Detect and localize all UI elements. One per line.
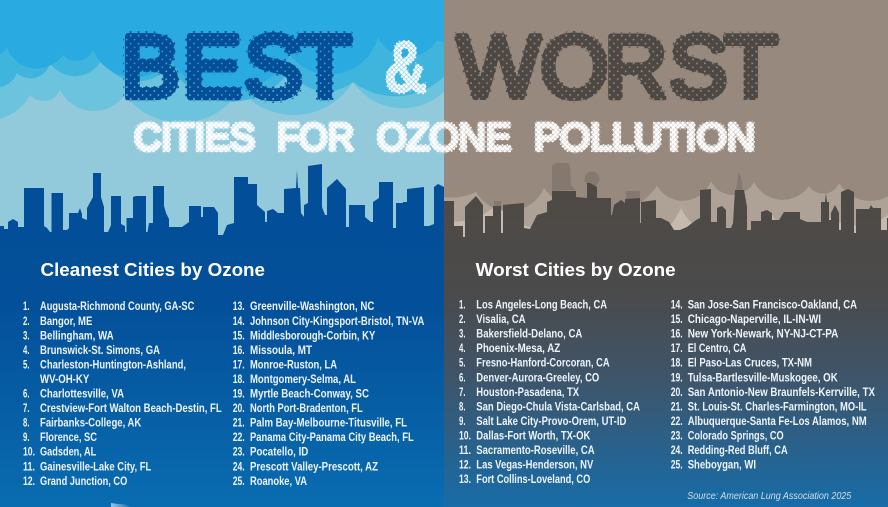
list: cleanest cities 1-12: 3.	[23, 329, 30, 342]
subtitle: OZONE	[377, 117, 511, 159]
list: worst cities 1-13: Houston-Pasadena, TX	[476, 386, 579, 399]
list: worst cities 1-13: 3.	[459, 328, 466, 341]
list: worst cities 14-25: 20.	[671, 386, 683, 399]
list: cleanest cities 13-25: Pocatello, ID	[250, 446, 308, 459]
list: cleanest cities 13-25: Monroe-Ruston, LA	[250, 358, 337, 371]
subtitle: POLLUTION	[534, 117, 755, 159]
list: worst cities 14-25: 16.	[671, 328, 683, 341]
list: cleanest cities 13-25: 22.	[233, 431, 245, 444]
subtitle: FOR	[277, 117, 354, 159]
list: worst cities 1-13: Phoenix-Mesa, AZ	[476, 342, 560, 355]
list: cleanest cities 13-25: Greenville-Washington, NC	[250, 300, 375, 313]
list: cleanest cities 13-25: 18.	[233, 373, 245, 386]
list: worst cities 1-13: Fresno-Hanford-Corcoran, CA	[476, 357, 610, 370]
faint buildings behind the smog	[494, 163, 743, 207]
list: worst cities 1-13: Visalia, CA	[476, 313, 526, 326]
list: worst cities 14-25: Chicago-Naperville, IL-IN-WI	[688, 313, 821, 326]
list: worst cities 1-13: 8.	[459, 400, 466, 413]
title: WORST: WORST	[457, 17, 778, 116]
panel: polluted sky	[444, 0, 888, 237]
list: cleanest cities 1-12: 1.	[23, 300, 30, 313]
list: worst cities 1-13	[459, 298, 641, 486]
list: worst cities 14-25: El Centro, CA	[688, 342, 747, 355]
list: cleanest cities 1-12: 5.	[23, 358, 30, 371]
list: worst cities 1-13: Fort Collins-Loveland, CO	[476, 473, 590, 486]
list: worst cities 1-13: Las Vegas-Henderson, NV	[476, 459, 594, 472]
list: cleanest cities 1-12: 12.	[23, 475, 35, 488]
list: cleanest cities 1-12: 10.	[23, 446, 35, 459]
list: worst cities 14-25: 22.	[671, 415, 683, 428]
list: worst cities 1-13: 5.	[459, 357, 466, 370]
list: cleanest cities 13-25: Johnson City-Kingsport-Bristol, TN-VA	[250, 315, 425, 328]
source note: Source: American Lung Association 2025	[687, 490, 851, 502]
list: cleanest cities 13-25: 24.	[233, 460, 245, 473]
subtitle	[134, 117, 755, 159]
list: worst cities 14-25: 18.	[671, 357, 683, 370]
list: cleanest cities 13-25: Palm Bay-Melbourne-Titusville, FL	[250, 417, 407, 430]
list: worst cities 1-13: 4.	[459, 342, 466, 355]
title: ampersand: &	[384, 28, 427, 108]
list: cleanest cities 13-25: Middlesborough-Corbin, KY	[250, 329, 376, 342]
list: cleanest cities 13-25: Myrtle Beach-Conway, SC	[250, 388, 370, 400]
list: worst cities 1-13: 2.	[459, 313, 466, 326]
title: ampersand: &	[384, 28, 427, 108]
list: worst cities 1-13: 6.	[459, 371, 466, 384]
list: cleanest cities 1-12: Brunswick-St. Simons, GA	[40, 344, 161, 357]
list: worst cities 14-25: 25.	[671, 459, 683, 472]
subtitle: OZONE	[377, 117, 511, 159]
panel: clean sky	[0, 0, 444, 235]
list: cleanest cities 1-12	[23, 300, 222, 488]
list: cleanest cities 1-12: 6.	[23, 388, 30, 400]
list: cleanest cities 1-12: Gadsden, AL	[40, 446, 96, 459]
list: worst cities 14-25: Sheboygan, WI	[688, 459, 756, 472]
list: cleanest cities 1-12: Gainesville-Lake City, FL	[40, 460, 151, 473]
subtitle: CITIES	[134, 117, 255, 159]
title: WORST: WORST	[457, 17, 778, 116]
list: worst cities 1-13: Bakersfield-Delano, CA	[476, 328, 583, 341]
list: worst cities 14-25: 14.	[671, 298, 683, 312]
list: cleanest cities 13-25	[233, 300, 425, 488]
list: cleanest cities 13-25: 16.	[233, 344, 245, 357]
list: cleanest cities 13-25: 15.	[233, 329, 245, 342]
list: cleanest cities 1-12: Florence, SC	[40, 431, 98, 444]
list: worst cities 1-13: 7.	[459, 386, 466, 399]
list: worst cities 1-13: 10.	[459, 430, 471, 442]
list: cleanest cities 13-25: Montgomery-Selma, AL	[250, 373, 356, 386]
list: worst cities 1-13: San Diego-Chula Vista-Carlsbad, CA	[476, 400, 641, 413]
list: worst cities 14-25: Colorado Springs, CO	[688, 430, 784, 442]
heading: cleanest cities: Cleanest Cities by Ozone	[40, 259, 265, 280]
list: cleanest cities 1-12: Bangor, ME	[40, 315, 93, 328]
subtitle: POLLUTION	[534, 117, 755, 159]
list: worst cities 1-13: 9.	[459, 415, 466, 428]
subtitle: CITIES	[134, 117, 255, 159]
list: cleanest cities 1-12: WV-OH-KY	[40, 373, 90, 386]
list: worst cities 14-25: New York-Newark, NY-NJ-CT-PA	[688, 328, 839, 341]
heading: worst cities: Worst Cities by Ozone	[476, 259, 676, 280]
list: cleanest cities 1-12: Fairbanks-College, AK	[40, 417, 142, 430]
list: worst cities 14-25: 23.	[671, 430, 683, 442]
list: cleanest cities 13-25: Panama City-Panama City Beach, FL	[250, 431, 414, 444]
list: worst cities 1-13: Sacramento-Roseville, CA	[476, 444, 595, 457]
small logo fragment at bottom edge	[111, 503, 131, 507]
list: worst cities 14-25: Tulsa-Bartlesville-Muskogee, OK	[688, 371, 838, 384]
list: worst cities 14-25: 21.	[671, 400, 683, 413]
list: cleanest cities 1-12: 2.	[23, 315, 30, 328]
list: cleanest cities 13-25: 14.	[233, 315, 245, 328]
list: cleanest cities 13-25: Prescott Valley-Prescott, AZ	[250, 460, 378, 473]
list: worst cities 1-13: 12.	[459, 459, 471, 472]
list: cleanest cities 13-25: Roanoke, VA	[250, 475, 308, 488]
list: cleanest cities 13-25: 19.	[233, 388, 245, 400]
list: cleanest cities 1-12: 11.	[23, 460, 35, 473]
skyline: polluted city	[444, 183, 888, 507]
list: cleanest cities 1-12: Bellingham, WA	[40, 329, 114, 342]
list: worst cities 14-25: El Paso-Las Cruces, TX-NM	[688, 357, 812, 370]
list: worst cities 1-13: 1.	[459, 298, 466, 312]
list: cleanest cities 13-25: 23.	[233, 446, 245, 459]
list: cleanest cities 1-12: Charlottesville, VA	[40, 388, 125, 400]
list: cleanest cities 13-25: Missoula, MT	[250, 344, 312, 357]
list: worst cities 1-13: Dallas-Fort Worth, TX-OK	[476, 430, 591, 442]
list: cleanest cities 13-25: 25.	[233, 475, 245, 488]
list: cleanest cities 1-12: Augusta-Richmond County, GA-SC	[40, 300, 195, 313]
list: cleanest cities 13-25: North Port-Bradenton, FL	[250, 402, 363, 415]
list: worst cities 14-25	[671, 298, 875, 472]
list: cleanest cities 13-25: 20.	[233, 402, 245, 415]
list: cleanest cities 1-12: 4.	[23, 344, 30, 357]
list: worst cities 1-13: Los Angeles-Long Beach, CA	[476, 298, 608, 312]
subtitle: FOR	[277, 117, 354, 159]
list: worst cities 14-25: 15.	[671, 313, 683, 326]
list: worst cities 14-25: 24.	[671, 444, 683, 457]
title: BEST: BEST	[121, 17, 352, 116]
list: worst cities 1-13: 11.	[459, 444, 471, 457]
list: cleanest cities 1-12: 7.	[23, 402, 30, 415]
list: cleanest cities 1-12: 9.	[23, 431, 30, 444]
list: cleanest cities 1-12: Grand Junction, CO	[40, 475, 127, 488]
list: worst cities 1-13: Salt Lake City-Provo-Orem, UT-ID	[476, 415, 626, 428]
title: BEST: BEST	[121, 17, 352, 116]
list: cleanest cities 13-25: 13.	[233, 300, 245, 313]
list: cleanest cities 1-12: Crestview-Fort Walton Beach-Destin, FL	[40, 402, 222, 415]
list: cleanest cities 1-12: Charleston-Huntington-Ashland,	[40, 358, 186, 371]
skyline: clean city	[0, 164, 444, 507]
list: worst cities 14-25: Redding-Red Bluff, CA	[688, 444, 788, 457]
list: cleanest cities 13-25: 17.	[233, 358, 245, 371]
list: cleanest cities 1-12: 8.	[23, 417, 30, 430]
list: worst cities 14-25: 19.	[671, 371, 683, 384]
list: worst cities 1-13: Denver-Aurora-Greeley, CO	[476, 371, 599, 384]
list: worst cities 14-25: 17.	[671, 342, 683, 355]
list: worst cities 1-13: 13.	[459, 473, 471, 486]
list: cleanest cities 13-25: 21.	[233, 417, 245, 430]
